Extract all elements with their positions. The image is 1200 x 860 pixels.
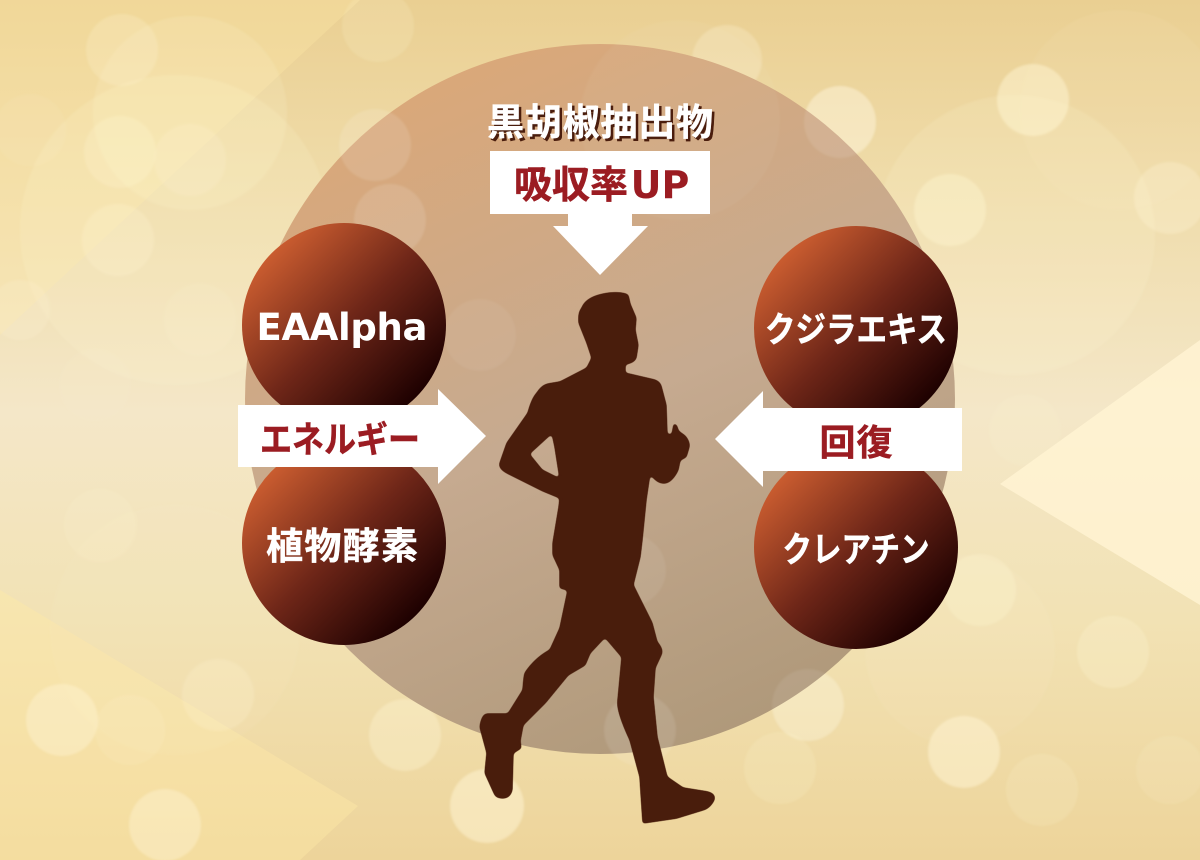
arrow: 回復 (left) bbox=[715, 391, 962, 487]
heading: 黒胡椒抽出物: 黒胡椒抽出物 bbox=[490, 94, 716, 148]
arrow: 吸収率UP (down): 吸収率 bbox=[514, 154, 628, 209]
arrow: 吸収率UP (down): UP bbox=[631, 163, 689, 207]
sphere: クレアチン: クレアチン bbox=[782, 522, 930, 573]
sphere: 植物酵素 bbox=[242, 441, 446, 645]
arrow: エネルギー (right): エネルギー bbox=[260, 411, 420, 463]
runner silhouette bbox=[480, 293, 714, 823]
sphere: クジラエキス bbox=[754, 226, 958, 430]
sphere: クジラエキス: クジラエキス bbox=[765, 302, 947, 353]
heading: 黒胡椒抽出物: 黒胡椒抽出物 bbox=[487, 92, 713, 146]
sphere: 植物酵素: 植物酵素 bbox=[266, 516, 418, 570]
arrow: 回復 (left): 回復 bbox=[820, 414, 892, 466]
large central circle bbox=[245, 20, 955, 766]
sphere: EAAlpha: EAAlpha bbox=[256, 306, 428, 349]
sphere: EAAlpha bbox=[242, 223, 446, 427]
sphere: クレアチン bbox=[754, 445, 958, 649]
arrow: 吸収率UP (down) bbox=[490, 151, 710, 275]
arrow: エネルギー (right) bbox=[238, 389, 486, 484]
